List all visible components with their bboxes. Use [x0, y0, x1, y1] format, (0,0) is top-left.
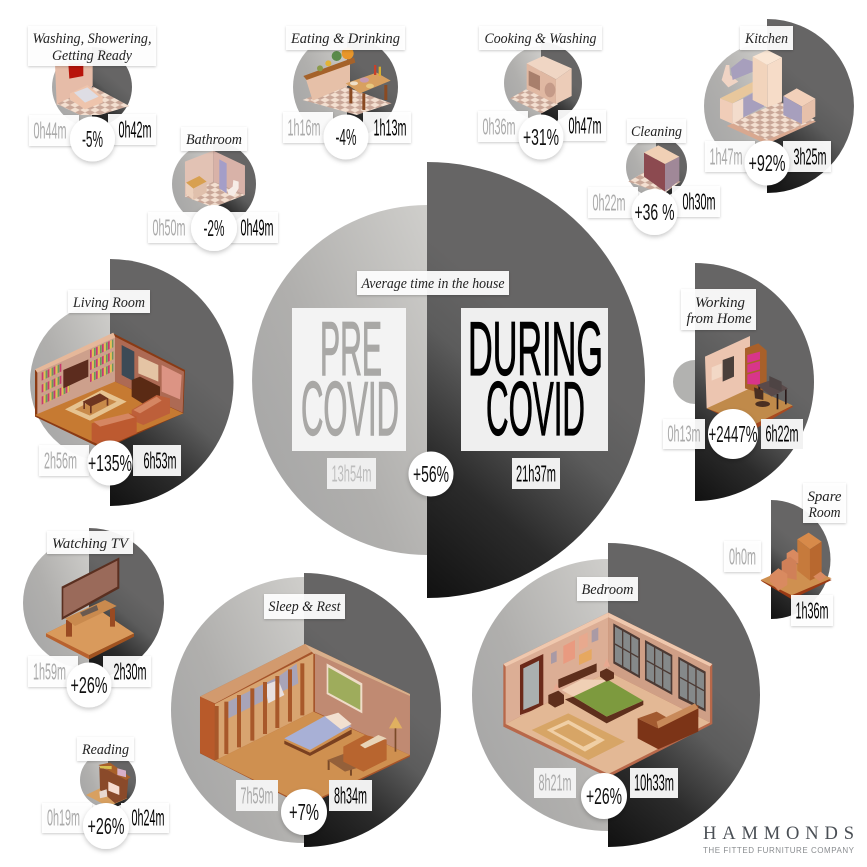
pre time: 0h44m [34, 118, 66, 144]
label: cooking: Cooking & Washing [484, 31, 596, 47]
panel: central average time in the house: COVID [301, 367, 399, 452]
label: watching tv: Watching TV [52, 536, 130, 552]
percent change [281, 789, 327, 835]
label: bedroom [577, 577, 638, 601]
label: average time [357, 271, 509, 295]
percent change [744, 140, 790, 186]
icon: sleep room [200, 644, 410, 807]
panel: sleep and rest [171, 573, 441, 847]
percent change: +26% [88, 813, 125, 839]
icon: fireplace and books [86, 763, 131, 807]
logo: hammonds: THE FITTED FURNITURE COMPANY [703, 846, 855, 855]
label: spare room [803, 483, 846, 523]
during time [512, 458, 560, 489]
panel: central average time in the house [252, 162, 645, 598]
heading: during covid [461, 307, 608, 452]
percent change: +26% [70, 672, 108, 698]
heading: pre covid [292, 307, 406, 452]
pre time: 2h56m [44, 448, 77, 474]
percent change: -2% [204, 215, 225, 241]
panel: cleaning [588, 119, 720, 235]
percent change: +7% [289, 799, 319, 825]
pre time [39, 445, 89, 476]
during time: 10h33m [634, 770, 674, 796]
during time [103, 656, 151, 687]
icon: home office [705, 336, 793, 430]
label: bedroom: Bedroom [582, 582, 634, 598]
during time [761, 419, 803, 449]
during time: 0h42m [118, 116, 152, 142]
percent change: +56% [413, 461, 449, 487]
heading: pre covid: PRE [320, 307, 382, 392]
pre time [236, 780, 278, 811]
pre time: 1h47m [710, 144, 742, 170]
pre time: 0h50m [152, 214, 186, 240]
percent change [408, 452, 454, 496]
during time: 0h24m [132, 804, 164, 830]
panel: eating and drinking [283, 26, 411, 160]
label: living room [68, 290, 150, 313]
icon: tv on stand [46, 557, 134, 659]
pre time [724, 541, 761, 572]
panel: watching tv [23, 528, 164, 708]
label: average time: Average time in the house [361, 276, 505, 292]
icon: bathroom with bathtub [55, 63, 129, 115]
during time: 0h47m [568, 112, 602, 138]
pre time: 0h0m [729, 544, 756, 570]
during time: 1h36m [796, 598, 828, 624]
pre time: 13h54m [332, 460, 372, 486]
during time: 8h34m [334, 782, 367, 808]
label: spare room: Room [808, 505, 840, 521]
percent change [581, 773, 627, 819]
label: washing: Washing, Showering, [32, 31, 152, 47]
pre time [28, 656, 78, 687]
icon: boxes and wardrobe [761, 533, 832, 599]
icon: bathroom [185, 151, 245, 207]
during time [630, 768, 678, 798]
percent change [708, 409, 758, 459]
pre time: 8h21m [538, 770, 572, 796]
percent change: +31% [523, 124, 559, 150]
pre time: 1h59m [33, 658, 66, 684]
logo: hammonds: HAMMONDS [703, 824, 854, 844]
percent change [88, 440, 132, 486]
during time [133, 445, 181, 476]
panel: bathroom [148, 127, 278, 251]
label: watching tv [47, 531, 133, 554]
label: living room: Living Room [72, 295, 145, 311]
percent change: -4% [336, 124, 357, 150]
label: sleep and rest [264, 594, 345, 619]
during time: 21h37m [516, 460, 556, 486]
label: kitchen [740, 26, 793, 50]
icon: kitchen [720, 50, 816, 144]
pre time [663, 419, 705, 449]
label: reading: Reading [81, 742, 129, 758]
label: eating: Eating & Drinking [290, 31, 400, 47]
percent change: +36 % [634, 199, 675, 225]
percent change [66, 662, 112, 708]
panel: cooking and washing [478, 26, 606, 160]
percent change: +26% [586, 783, 622, 809]
pre time [327, 458, 376, 489]
pre time: 0h22m [592, 190, 626, 216]
label: working from home: from Home [686, 311, 752, 327]
icon: sink cabinet [628, 145, 681, 194]
pre time: 0h19m [47, 804, 80, 830]
during time: 1h13m [374, 114, 406, 140]
during time: 2h30m [114, 658, 146, 684]
label: washing [28, 26, 156, 66]
icon: dining counter and table [303, 47, 392, 115]
panel: central average time in the house: DURING [468, 307, 603, 392]
pre time: 0h36m [482, 114, 516, 140]
panel: working from home [663, 263, 814, 501]
label: bathroom: Bathroom [186, 132, 242, 148]
during time [791, 595, 833, 626]
percent change: +2447% [708, 421, 758, 447]
logo: hammonds [703, 824, 855, 855]
percent change: -5% [82, 126, 103, 152]
during time: 6h22m [766, 420, 798, 446]
during time: 0h49m [240, 214, 274, 240]
label: spare room: Spare [808, 489, 842, 505]
pre time: 0h13m [668, 420, 700, 446]
label: sleep and rest: Sleep & Rest [268, 599, 341, 615]
during time: 6h53m [144, 448, 176, 474]
percent change: +135% [88, 450, 132, 476]
panel: kitchen [704, 19, 854, 193]
icon: oven and washing machine [510, 56, 572, 113]
panel: bedroom [472, 543, 760, 847]
panel: washing, showering, getting ready [28, 26, 156, 162]
label: kitchen: Kitchen [744, 31, 788, 47]
panel: living room [30, 259, 234, 506]
pre time [534, 768, 576, 798]
percent change: +92% [748, 150, 786, 176]
during time [329, 780, 372, 811]
icon: bedroom [503, 613, 712, 777]
label: working from home: Working [695, 295, 745, 311]
heading: during covid: COVID [486, 367, 585, 452]
label: working from home [681, 289, 756, 330]
during time: 3h25m [794, 144, 826, 170]
pre time [705, 141, 755, 172]
pre time: 7h59m [240, 782, 274, 808]
label: washing: Getting Ready [52, 48, 133, 64]
icon: living room [35, 333, 185, 449]
pre time: 1h16m [288, 114, 320, 140]
label: cleaning: Cleaning [631, 124, 682, 140]
panel: spare room [724, 483, 846, 626]
during time: 0h30m [682, 188, 716, 214]
panel: reading [42, 737, 169, 849]
during time [783, 141, 831, 172]
